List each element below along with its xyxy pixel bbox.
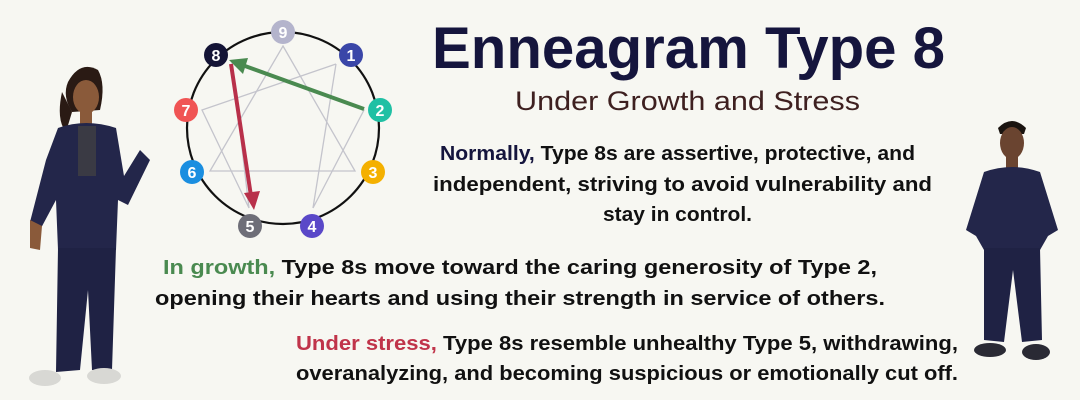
text block: normally: stay in control.	[603, 204, 752, 226]
title: Enneagram Type 8	[432, 16, 945, 81]
arrow: growth to 2	[229, 58, 364, 109]
nodes: 7	[182, 103, 191, 120]
text block: growth: opening their hearts and using their strength in service of others.	[155, 288, 885, 310]
text block: normally	[433, 143, 932, 226]
text block: stress: overanalyzing, and becoming suspicious or emotionally cut off.	[296, 363, 958, 385]
text block: stress	[296, 333, 958, 385]
text block: normally: independent, striving to avoid vulnerability and	[433, 174, 932, 196]
nodes: 1	[347, 48, 356, 65]
nodes	[174, 20, 392, 238]
subtitle: Under Growth and Stress	[515, 86, 860, 116]
nodes: 8	[212, 48, 221, 65]
text block: normally: Normally, Type 8s are assertive, protective, and	[440, 143, 915, 165]
text block: growth: In growth, Type 8s move toward the caring generosity of Type 2,	[163, 257, 877, 279]
nodes: 9	[279, 25, 288, 42]
nodes: 3	[369, 165, 378, 182]
figure: man right	[966, 121, 1058, 360]
enneagram diagram	[174, 20, 392, 238]
nodes: 6	[188, 165, 197, 182]
nodes: 5	[246, 219, 255, 236]
figure: woman left	[29, 67, 150, 386]
nodes: 4	[308, 219, 317, 236]
text block: growth	[155, 257, 885, 310]
text block: stress: Under stress, Type 8s resemble unhealthy Type 5, withdrawing,	[296, 333, 958, 355]
nodes: 2	[376, 103, 385, 120]
arrow: stress to 5	[231, 64, 260, 210]
